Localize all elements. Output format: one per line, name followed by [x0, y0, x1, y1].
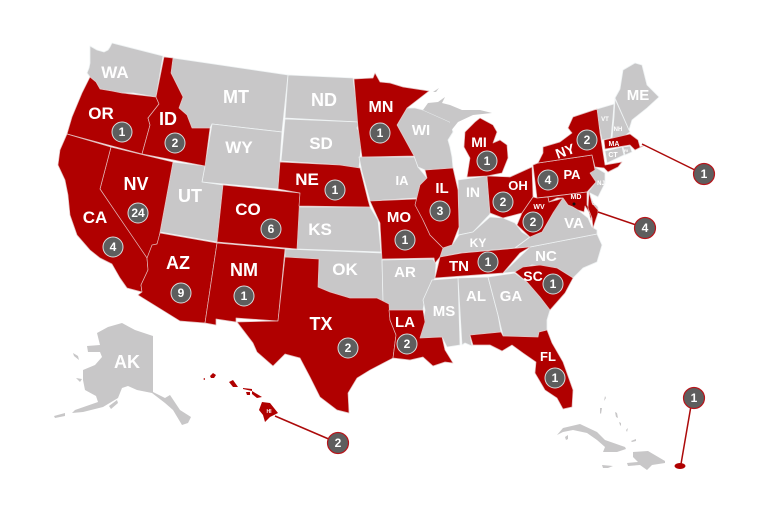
state labels: MO — [387, 209, 411, 226]
state labels: TN — [449, 258, 469, 275]
state labels: LA — [395, 314, 415, 331]
state labels: AL — [466, 288, 486, 305]
state labels: AR — [394, 264, 416, 281]
state labels: UT — [178, 186, 202, 206]
state labels: FL — [540, 349, 556, 364]
state labels: IL — [435, 180, 449, 197]
state labels: ID — [159, 109, 177, 129]
state labels: SD — [309, 134, 333, 153]
count badges: 1 — [377, 126, 384, 140]
count badges: 3 — [437, 204, 444, 218]
small state labels: NJ — [597, 181, 605, 187]
callouts with leader lines: 1 — [701, 167, 708, 181]
count badges: 1 — [484, 154, 491, 168]
map: Caribbean — [557, 396, 665, 470]
state labels: NV — [123, 174, 149, 194]
state labels: WA — [101, 63, 129, 82]
state labels: MN — [369, 99, 393, 116]
icon: Washington DC dot — [572, 202, 576, 206]
small state labels: WV — [533, 204, 545, 211]
callouts with leader lines: 4 — [642, 221, 649, 235]
count badges: 9 — [178, 286, 185, 300]
state labels: IA — [396, 173, 409, 188]
small state labels: CT — [608, 152, 618, 159]
state labels: MT — [223, 87, 249, 107]
count badges: 1 — [241, 289, 248, 303]
state labels: NM — [230, 260, 258, 280]
small state labels: VT — [601, 117, 609, 123]
state labels: IN — [466, 184, 480, 200]
small state labels: RI — [624, 148, 628, 153]
count badges: 2 — [172, 136, 179, 150]
count badges: 4 — [545, 173, 552, 187]
state labels: ME — [627, 87, 649, 104]
count badges: 2 — [404, 337, 411, 351]
small state labels: HI — [266, 409, 272, 415]
state labels: TX — [309, 314, 333, 334]
state labels: KS — [308, 220, 332, 239]
callouts with leader lines: 2 — [335, 436, 342, 450]
count badges: 2 — [530, 215, 537, 229]
count badges: 2 — [584, 133, 591, 147]
state labels: CA — [83, 208, 107, 227]
state labels: GA — [500, 288, 522, 305]
state labels: WY — [225, 138, 253, 157]
state labels: SC — [523, 268, 543, 284]
small state labels: DE — [592, 201, 598, 206]
map: states without locations — [54, 43, 665, 470]
count badges: 1 — [119, 125, 126, 139]
count badges: 1 — [485, 255, 492, 269]
count badges: 1 — [402, 233, 409, 247]
map: Hawaii — [203, 373, 278, 422]
state labels: KY — [470, 236, 486, 250]
count badges: 2 — [500, 195, 507, 209]
state labels: PA — [563, 167, 581, 182]
state labels: WI — [412, 122, 430, 139]
state labels: AZ — [166, 253, 190, 273]
callouts with leader lines — [275, 144, 714, 464]
state labels: OH — [508, 178, 528, 193]
map: highlighted states — [58, 57, 686, 469]
state labels: VA — [564, 215, 584, 232]
count badges: 4 — [110, 240, 117, 254]
state labels: ND — [311, 90, 337, 110]
small state labels — [266, 117, 628, 415]
count badges: 24 — [131, 206, 145, 220]
state labels: OK — [332, 260, 358, 279]
small state labels: MA — [609, 141, 619, 148]
state labels — [83, 63, 649, 372]
count badges: 1 — [552, 371, 559, 385]
state labels: NY — [553, 140, 577, 162]
small state labels: NH — [614, 127, 622, 133]
state labels: CO — [235, 200, 261, 219]
count badges: 1 — [332, 183, 339, 197]
icon: Puerto Rico — [674, 463, 686, 469]
count badges: 2 — [345, 341, 352, 355]
map: Alaska — [54, 323, 191, 425]
count badges — [103, 122, 597, 388]
state labels: NC — [535, 248, 557, 265]
count badges: 1 — [550, 277, 557, 291]
state labels: OR — [88, 104, 114, 123]
state labels: MI — [471, 134, 487, 150]
callouts with leader lines: 1 — [691, 391, 698, 405]
state labels: NE — [295, 170, 319, 189]
count badges: 6 — [268, 222, 275, 236]
state labels: AK — [114, 352, 140, 372]
small state labels: MD — [571, 194, 581, 201]
state labels: MS — [433, 303, 455, 320]
